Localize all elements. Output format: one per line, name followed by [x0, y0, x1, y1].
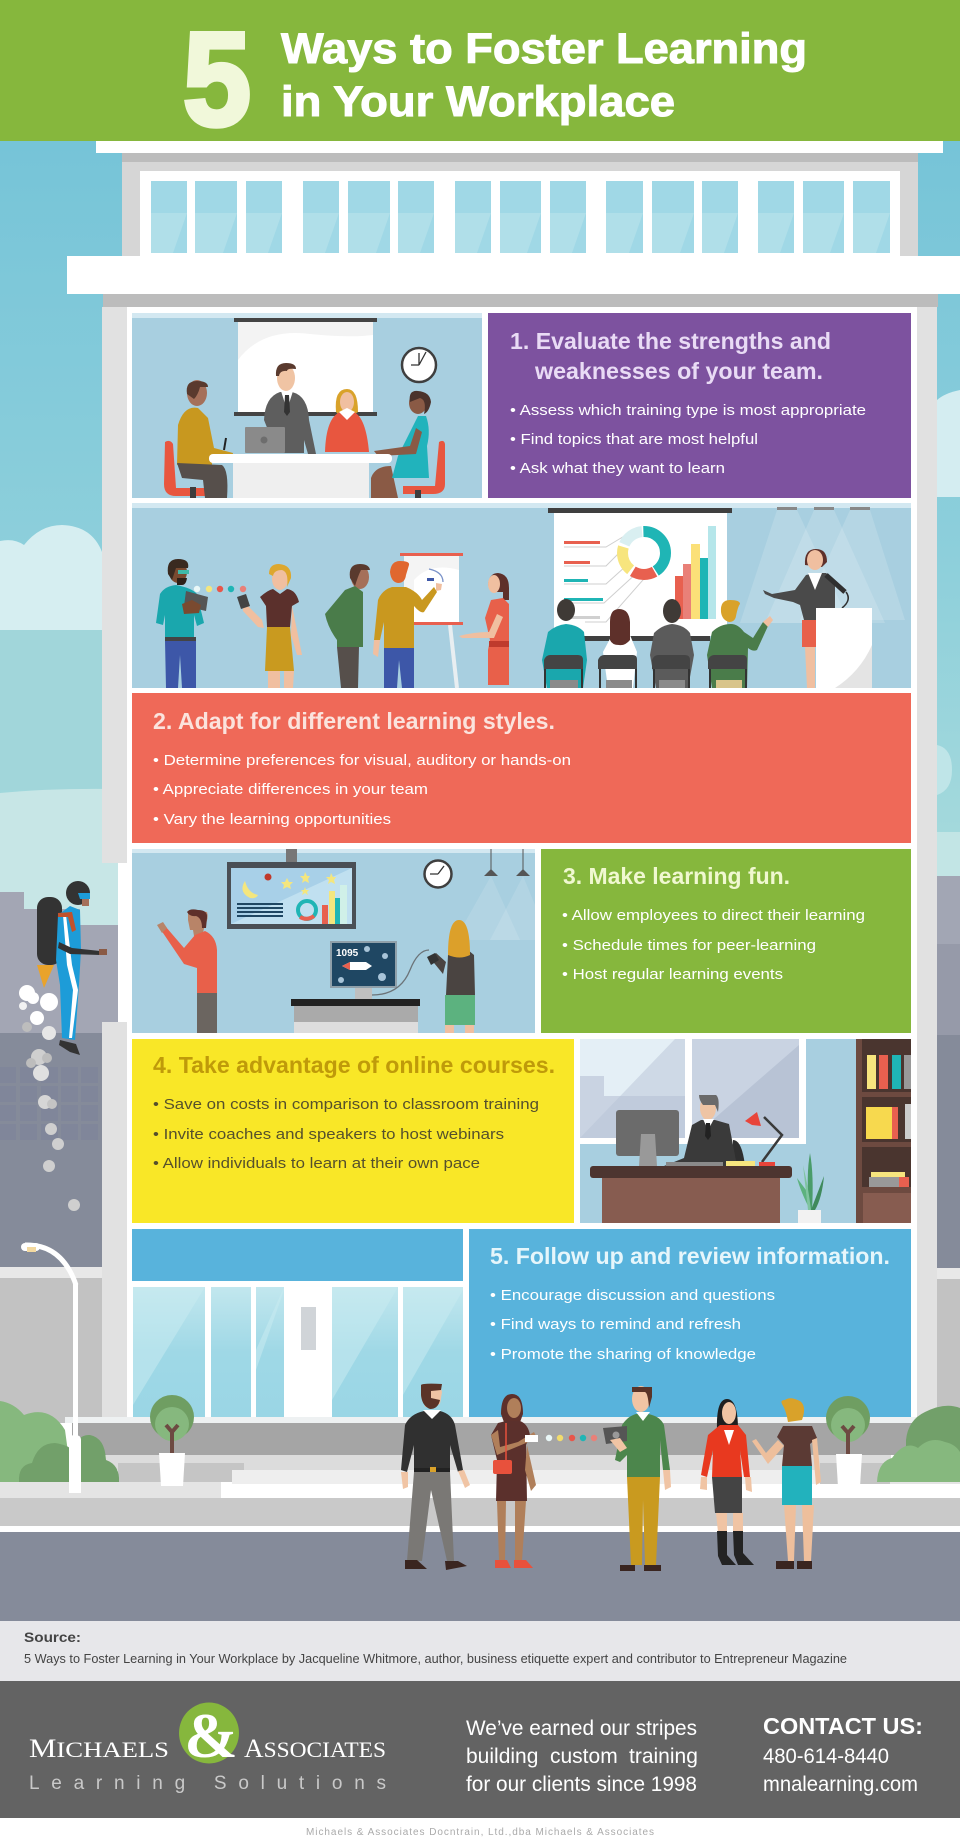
- title text: in Your Workplace: [281, 78, 675, 126]
- panel 5 illustration: entrance: [132, 1229, 463, 1417]
- bullets: • Find topics that are most helpful: [510, 431, 758, 448]
- tagline: building: [466, 1745, 538, 1768]
- panel 5 text: blue card: [469, 1229, 911, 1417]
- heading: 1. Evaluate the strengths and: [510, 328, 831, 354]
- game monitor and desk: 1095: [336, 948, 359, 959]
- background sky and city: [0, 141, 960, 1423]
- panel 4 text: yellow card: [132, 1039, 574, 1223]
- contact details: mnalearning.com: [763, 1773, 918, 1796]
- panel 1 text: purple card: [488, 313, 911, 498]
- heading: [510, 328, 831, 384]
- presenter: [763, 549, 835, 688]
- building upper floor with windows: [67, 141, 960, 307]
- logo: &: [184, 1700, 238, 1771]
- presentation screen: [548, 508, 732, 641]
- credit line: Michaels & Associates Docntrain, Ltd.,dba Michaels & Associates: [306, 1827, 654, 1838]
- bullets: [153, 1096, 539, 1172]
- clock: [424, 860, 452, 888]
- bullets: [562, 907, 865, 983]
- potted tree left: [150, 1395, 194, 1486]
- woman with game controller: [427, 920, 475, 1033]
- logo: [29, 1700, 386, 1794]
- ceiling lamps: [455, 849, 535, 940]
- wall clock: [402, 348, 436, 382]
- bullets: • Appreciate differences in your team: [153, 781, 428, 798]
- heading: 3. Make learning fun.: [563, 863, 790, 889]
- heading: 2. Adapt for different learning styles.: [153, 708, 555, 734]
- bullets: • Determine preferences for visual, auditory or hands-on: [153, 752, 571, 769]
- logo: ASSOCIATES: [244, 1734, 386, 1763]
- tagline: custom: [550, 1745, 618, 1768]
- woman with phone: [237, 564, 302, 688]
- seated man in mustard sweater: [164, 380, 233, 498]
- man at desk: [664, 1095, 745, 1166]
- lectern with microphone: [816, 575, 872, 688]
- bushes right: [877, 1406, 960, 1482]
- man in black sweater: [401, 1384, 470, 1570]
- jetpack: [37, 897, 62, 965]
- panel 2 text: red card: [132, 693, 911, 843]
- data dots: [194, 586, 246, 592]
- donut chart: [622, 532, 666, 574]
- bullets: • Invite coaches and speakers to host webinars: [153, 1126, 504, 1143]
- footer: [0, 1681, 960, 1818]
- game monitor and desk: [291, 941, 429, 1033]
- desk: [590, 1166, 792, 1223]
- heading: 4. Take advantage of online courses.: [153, 1052, 555, 1078]
- panel 4 illustration: office: [580, 1039, 911, 1223]
- office window: [580, 1039, 806, 1144]
- logo: Learning Solutions: [29, 1773, 386, 1794]
- title text: [281, 25, 807, 126]
- meeting table: [209, 454, 392, 498]
- body: [56, 906, 81, 1040]
- door keypad: [301, 1307, 316, 1350]
- contact details: [763, 1713, 923, 1796]
- source band: [0, 1621, 960, 1681]
- panel 3 illustration: games room: [132, 849, 535, 1033]
- audience member in teal: [542, 599, 587, 688]
- bullets: • Assess which training type is most appropriate: [510, 402, 866, 419]
- tagline: We’ve earned our stripes: [466, 1717, 697, 1740]
- tagline: [466, 1717, 698, 1796]
- bullets: • Promote the sharing of knowledge: [490, 1346, 756, 1363]
- woman in red jacket: [325, 389, 369, 452]
- steps and pavement: [0, 1417, 960, 1621]
- logo: MICHAELS: [29, 1734, 169, 1763]
- wall screen: [227, 849, 356, 929]
- seated woman in teal dress: [371, 391, 445, 498]
- bullets: • Host regular learning events: [562, 966, 783, 983]
- spotlights: [740, 507, 905, 623]
- data dots: [546, 1435, 597, 1441]
- bullets: [490, 1287, 775, 1363]
- flame: [37, 965, 54, 988]
- audience member in green with raised hand: [707, 600, 773, 688]
- woman in red jacket: [700, 1399, 754, 1565]
- bullets: • Allow individuals to learn at their own pace: [153, 1155, 480, 1172]
- bullets: • Encourage discussion and questions: [490, 1287, 775, 1304]
- desk lamp and book: [726, 1112, 782, 1166]
- man gesturing: [157, 909, 217, 1033]
- heading: 5. Follow up and review information.: [490, 1243, 890, 1269]
- smoke trail: [19, 985, 80, 1211]
- bookcase: [856, 1039, 911, 1223]
- heading: weaknesses of your team.: [534, 358, 823, 384]
- contact details: CONTACT US:: [763, 1713, 923, 1739]
- audience member in grey: [650, 599, 694, 688]
- bullets: • Schedule times for peer-learning: [562, 937, 816, 954]
- bullets: • Save on costs in comparison to classroom training: [153, 1096, 539, 1113]
- source band: Source:: [24, 1629, 81, 1645]
- man drawing on flip chart: [373, 561, 442, 688]
- bar chart: [675, 526, 716, 619]
- potted plant: [797, 1153, 824, 1223]
- building body: [102, 307, 937, 1423]
- woman in red dress: [459, 573, 509, 685]
- bullets: [510, 402, 866, 477]
- title banner: [0, 0, 960, 154]
- contact details: 480-614-8440: [763, 1745, 889, 1768]
- street lamp: [21, 1243, 81, 1493]
- man in green sweater with tablet: [603, 1386, 671, 1571]
- panel 3 text: green card: [541, 849, 911, 1033]
- bullets: • Find ways to remind and refresh: [490, 1316, 741, 1333]
- jetpack figure: [37, 881, 107, 1055]
- chart legend lines: [564, 535, 650, 622]
- panel 2 illustration: collaboration and presentation: [132, 503, 911, 688]
- bullets: • Vary the learning opportunities: [153, 811, 391, 828]
- panel 1 illustration: meeting room: [132, 313, 482, 498]
- desktop monitor: [616, 1110, 679, 1166]
- audience member in white with long hair: [598, 609, 637, 688]
- man with tablet: [156, 559, 208, 688]
- standing man in grey suit: [264, 363, 316, 454]
- source band: 5 Ways to Foster Learning in Your Workplace by Jacqueline Whitmore, author, business etiquette expert and contributor to Entrepreneur Magazine: [24, 1652, 847, 1666]
- laptop: [245, 427, 285, 453]
- bushes left: [0, 1401, 119, 1482]
- potted tree right: [826, 1396, 870, 1487]
- woman with bag and phone: [491, 1394, 538, 1568]
- woman from behind in teal skirt: [752, 1398, 821, 1569]
- bullets: [153, 752, 571, 828]
- projection screen: [234, 318, 377, 416]
- helmet and visor: [66, 881, 90, 905]
- title text: Ways to Foster Learning: [281, 25, 807, 73]
- bullets: • Allow employees to direct their learning: [562, 907, 865, 924]
- tagline: training: [629, 1745, 698, 1768]
- tagline: for our clients since 1998: [466, 1773, 697, 1796]
- flip chart: [400, 553, 463, 688]
- bullets: • Ask what they want to learn: [510, 460, 725, 477]
- man in green sweater: [325, 564, 370, 688]
- big numeral 5: 5: [183, 6, 251, 154]
